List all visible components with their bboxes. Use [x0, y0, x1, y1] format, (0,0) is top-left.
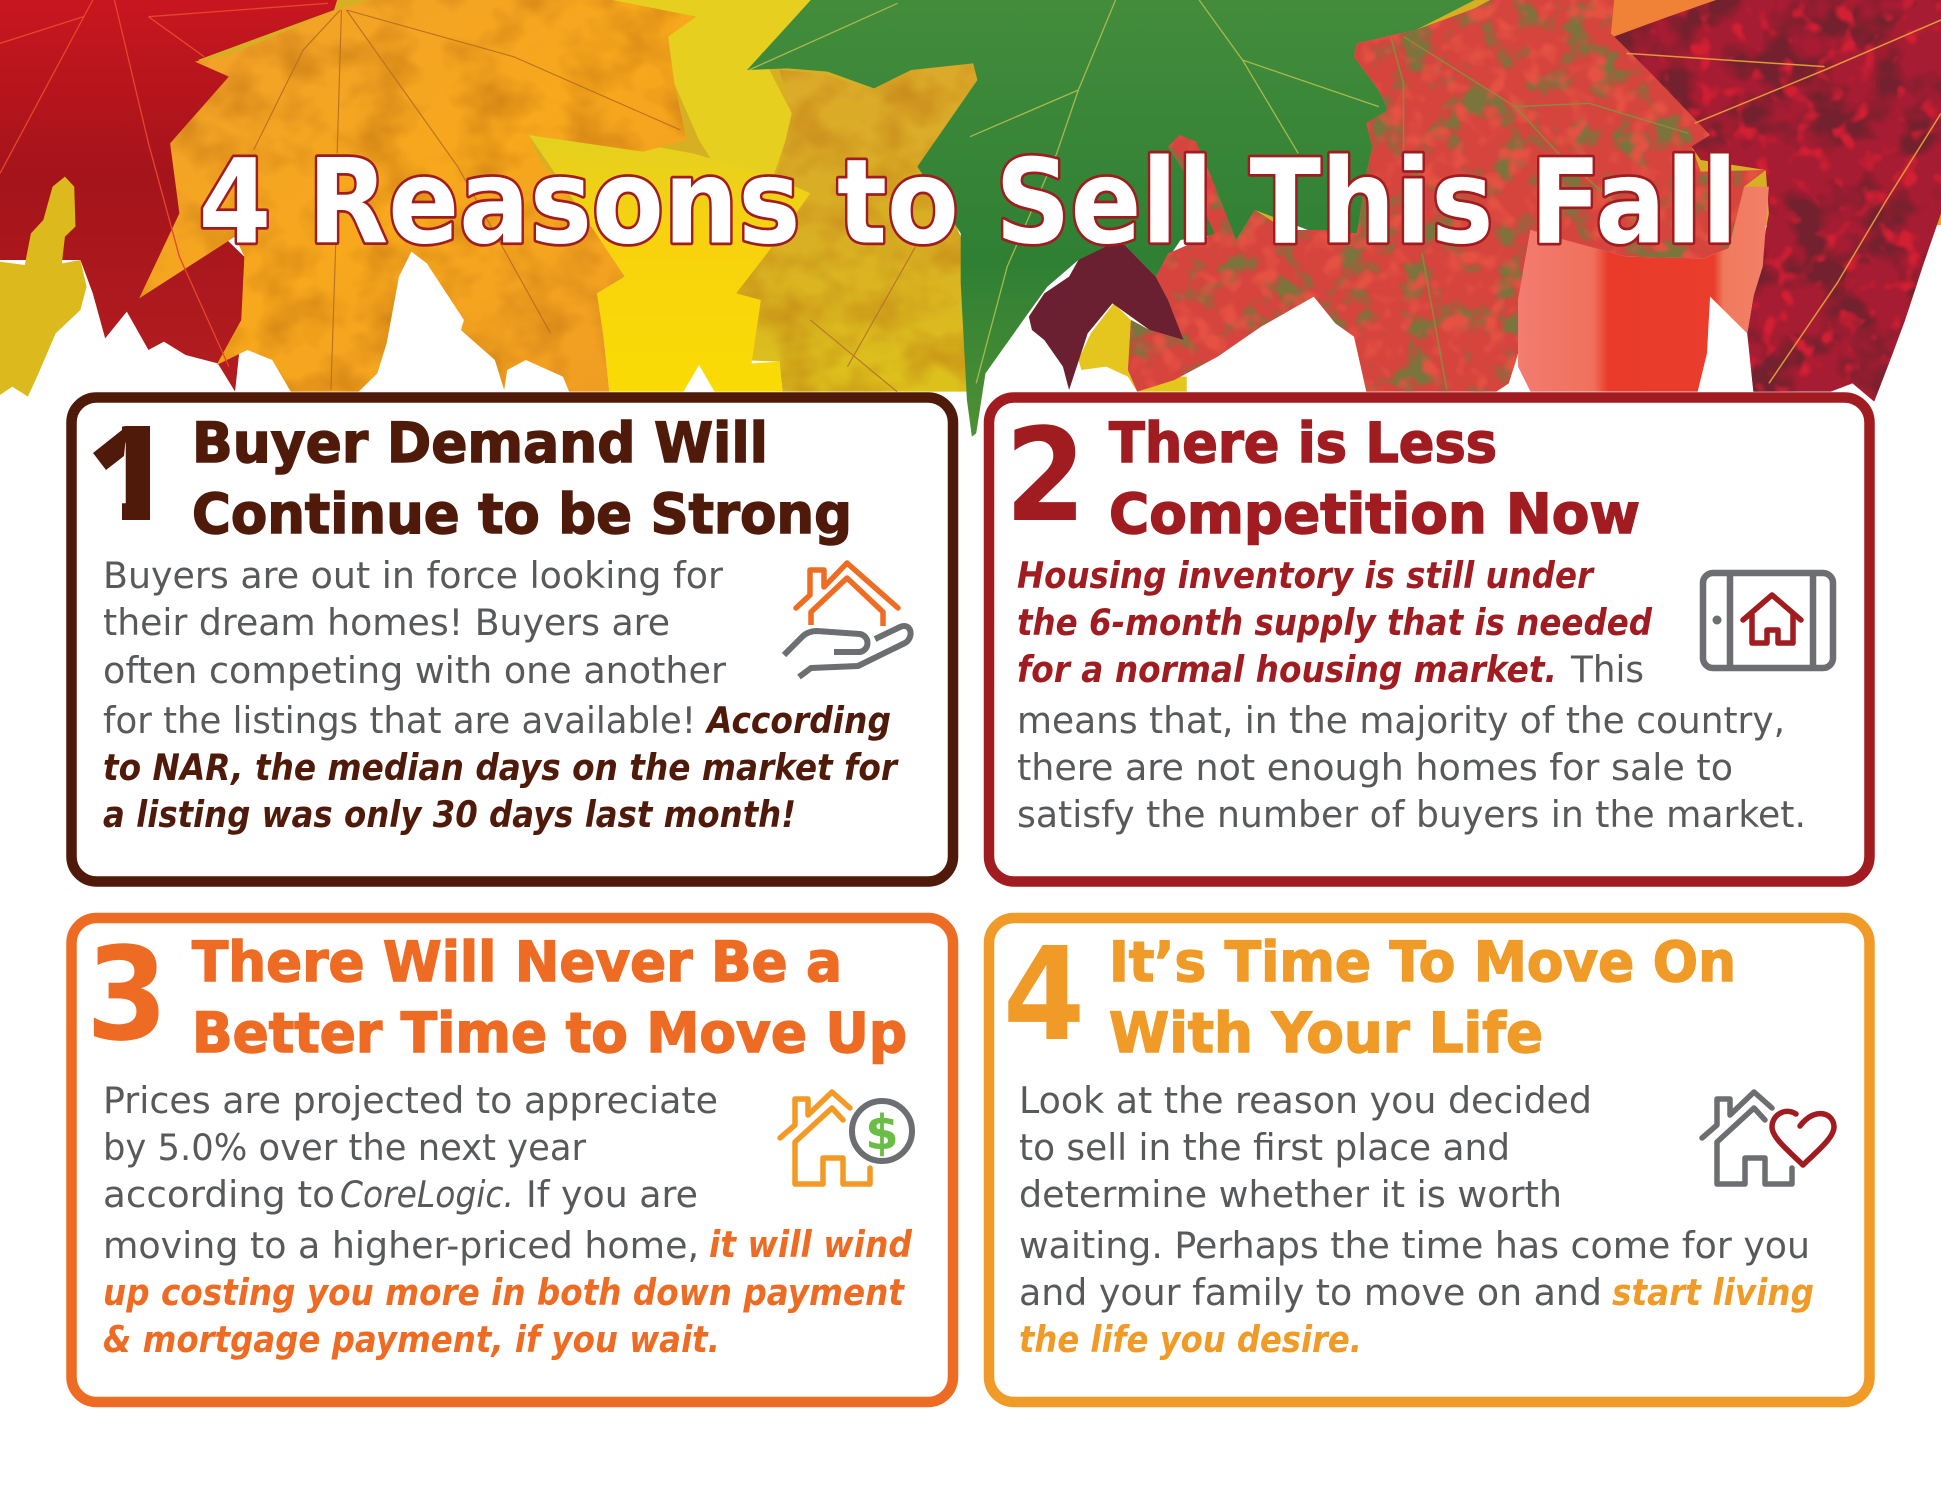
heading 4 — [1109, 930, 1736, 1065]
body text 3 — [103, 1079, 913, 1361]
body text 2: there are not enough homes for sale to — [1017, 746, 1733, 789]
icon: tablet with house — [1703, 573, 1833, 668]
body text 3: If you are — [526, 1173, 698, 1216]
body text 2: satisfy the number of buyers in the market. — [1017, 793, 1806, 836]
body text 2: Housing inventory is still under — [1017, 554, 1595, 597]
right leaves — [747, 0, 1941, 437]
leaf banner — [0, 0, 1941, 437]
heading 1 — [192, 411, 852, 546]
body text 1: for the listings that are available! — [103, 699, 696, 742]
number 3: 3 — [86, 920, 168, 1070]
right leaf veins — [749, 0, 1941, 390]
body text 1: their dream homes! Buyers are — [103, 601, 670, 644]
number 1 — [93, 426, 150, 520]
panel 1: buyer demand — [72, 398, 953, 882]
body text 4: Look at the reason you decided — [1019, 1079, 1592, 1122]
leaf: dark red right — [1614, 0, 1941, 402]
leaf: dark purple — [1029, 245, 1184, 390]
icon: house with heart — [1702, 1092, 1834, 1184]
body text 3: Prices are projected to appreciate — [103, 1079, 718, 1122]
icon: house with dollar coin: $ — [865, 1105, 899, 1161]
leaf: olive gold — [736, 63, 980, 392]
left leaves — [0, 0, 980, 397]
body text 2 — [1017, 554, 1806, 836]
heading 1: Buyer Demand Will — [192, 411, 768, 475]
body text 1: a listing was only 30 days last month! — [103, 793, 796, 836]
heading 2: There is Less — [1109, 411, 1497, 475]
leaf: small yellow — [1078, 303, 1187, 392]
heading 3: There Will Never Be a — [192, 930, 842, 994]
heading 4: It’s Time To Move On — [1109, 930, 1736, 994]
body text 4: waiting. Perhaps the time has come for you — [1019, 1224, 1810, 1267]
body text 4 — [1019, 1079, 1814, 1361]
body text 2: This — [1570, 648, 1644, 691]
body text 3: CoreLogic. — [340, 1173, 514, 1216]
icon: house in hand — [784, 563, 911, 677]
body text 1: to NAR, the median days on the market for — [103, 746, 899, 789]
number 4: 4 — [1003, 920, 1085, 1070]
body text 3: moving to a higher-priced home, — [103, 1224, 699, 1267]
body text 4: to sell in the first place and — [1019, 1126, 1510, 1169]
left leaf veins — [0, 0, 916, 392]
leaf: coral — [1518, 187, 1769, 392]
body text 1: often competing with one another — [103, 649, 726, 692]
body text 1: Buyers are out in force looking for — [103, 554, 723, 597]
leaf: far-left yellow — [0, 177, 87, 397]
title: 4 Reasons to Sell This Fall — [198, 134, 1738, 270]
icon: house with dollar coin — [780, 1092, 912, 1184]
body text 3: & mortgage payment, if you wait. — [103, 1318, 720, 1361]
leaf: orange sliver — [1589, 0, 1716, 37]
leaf: back yellow — [612, 0, 810, 177]
body text 4: start living — [1612, 1271, 1814, 1314]
body text 3: by 5.0% over the next year — [103, 1126, 586, 1169]
body text 2: the 6-month supply that is needed — [1017, 601, 1653, 644]
body text 1 — [103, 554, 899, 836]
body text 4: the life you desire. — [1019, 1318, 1362, 1361]
leaf: orange — [139, 0, 696, 392]
body text 2: means that, in the majority of the country, — [1017, 699, 1785, 742]
number 1: 1 — [83, 401, 188, 551]
number 2: 2 — [1005, 401, 1086, 551]
leaf: red — [0, 0, 337, 392]
leaf: green — [747, 0, 1475, 437]
body text 4: determine whether it is worth — [1019, 1173, 1562, 1216]
leaf: mixed red and green — [1128, 0, 1766, 392]
body text 2: for a normal housing market. — [1017, 648, 1557, 691]
heading 3: Better Time to Move Up — [192, 1001, 907, 1065]
body text 3: according to — [103, 1173, 335, 1216]
heading 2: Competition Now — [1109, 482, 1640, 546]
heading 1: Continue to be Strong — [192, 482, 852, 546]
panel 3: better time to move up — [72, 918, 953, 1402]
body text 3: it will wind — [709, 1223, 913, 1266]
heading 3 — [192, 930, 907, 1065]
panel 4: move on with your life — [989, 918, 1870, 1402]
heading 2 — [1109, 411, 1640, 546]
body text 3: up costing you more in both down payment — [103, 1271, 905, 1314]
body text 4: and your family to move on and — [1019, 1271, 1602, 1314]
leaf: bright yellow — [529, 135, 810, 392]
body text 1: According — [704, 699, 891, 742]
heading 4: With Your Life — [1109, 1001, 1543, 1065]
panel 2: less competition — [989, 398, 1870, 882]
